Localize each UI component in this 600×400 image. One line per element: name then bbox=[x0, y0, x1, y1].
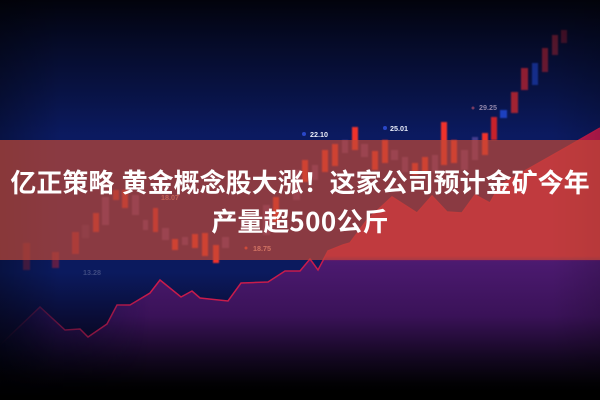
label markers bbox=[244, 106, 474, 250]
title: 产量超500公斤 bbox=[211, 202, 389, 239]
title: 亿正策略 黄金概念股大涨！这家公司预计金矿今年 bbox=[10, 168, 590, 198]
area chart bbox=[8, 127, 600, 370]
label: 13.28: 13.28 bbox=[83, 268, 101, 277]
label: 29.25: 29.25 bbox=[479, 103, 497, 112]
label: 18.75: 18.75 bbox=[253, 244, 271, 253]
candlesticks bbox=[23, 30, 567, 270]
label: 25.01: 25.01 bbox=[390, 124, 408, 133]
title bbox=[10, 168, 590, 239]
label: 18.07: 18.07 bbox=[161, 193, 179, 202]
label: 22.10: 22.10 bbox=[310, 130, 328, 139]
value labels bbox=[83, 103, 497, 277]
translucent red title band bbox=[0, 140, 600, 260]
